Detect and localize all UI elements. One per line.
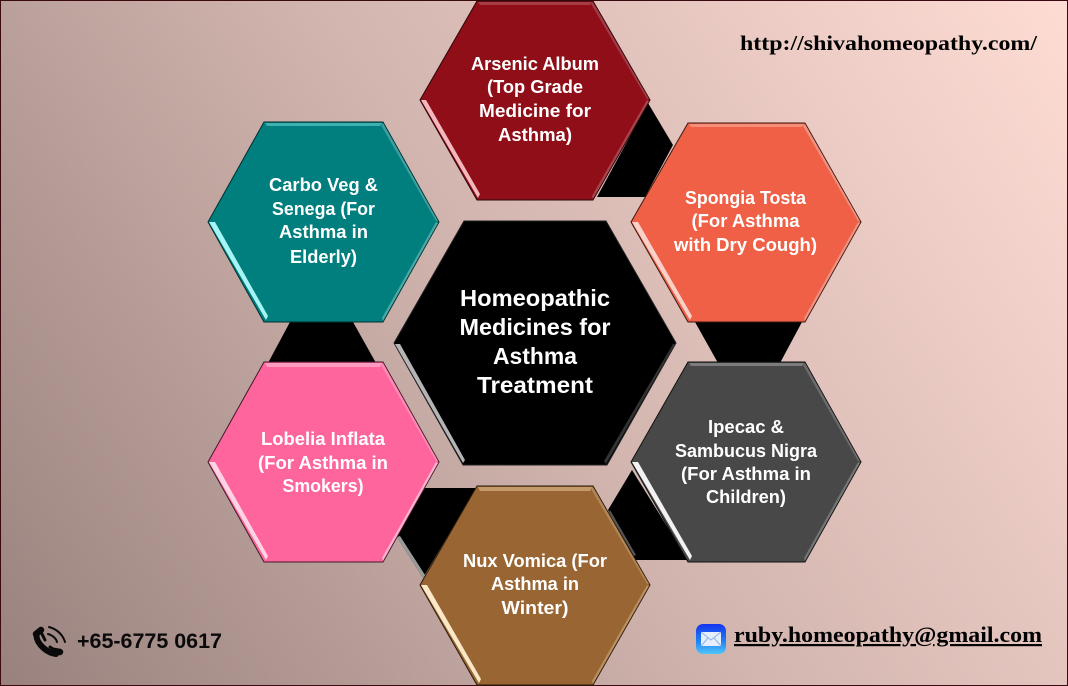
heading: centre title: Medicines for xyxy=(460,314,611,340)
heading: centre title xyxy=(460,285,611,398)
label: Arsenic Album: Asthma) xyxy=(498,125,572,145)
heading: centre title: Homeopathic xyxy=(460,285,610,311)
panel: Carbo Veg and Senega xyxy=(208,122,439,322)
connector: Ipecac to Nux xyxy=(608,470,688,560)
label: Lobelia Inflata: Lobelia Inflata xyxy=(261,429,386,449)
icon: mail xyxy=(696,624,726,654)
panel: Nux Vomica xyxy=(420,486,650,685)
label: Arsenic Album xyxy=(471,54,599,145)
label: Arsenic Album: Arsenic Album xyxy=(471,54,599,74)
label: Lobelia Inflata xyxy=(258,429,388,496)
label: Spongia Tosta: (For Asthma xyxy=(692,211,801,231)
label: Nux Vomica xyxy=(463,551,607,618)
label: Nux Vomica: Winter) xyxy=(502,598,568,618)
label: Spongia Tosta: with Dry Cough) xyxy=(673,235,817,255)
website URL: http://shivahomeopathy.com/ xyxy=(740,31,1038,55)
panel: centre hexagon xyxy=(394,221,676,465)
phone number: +65-6775 0617 xyxy=(77,630,222,653)
label: Carbo Veg and Senega: Elderly) xyxy=(290,247,357,267)
label: Ipecac and Sambucus Nigra: Ipecac & xyxy=(708,417,784,437)
icon: phone xyxy=(36,627,65,654)
label: Nux Vomica: Nux Vomica (For xyxy=(463,551,607,571)
heading: centre title: Asthma xyxy=(493,343,577,369)
heading: centre title: Treatment xyxy=(477,372,593,398)
label: Ipecac and Sambucus Nigra: Sambucus Nigra xyxy=(675,441,818,461)
label: Carbo Veg and Senega: Carbo Veg & xyxy=(269,175,378,195)
label: Lobelia Inflata: Smokers) xyxy=(282,476,364,496)
label: Ipecac and Sambucus Nigra xyxy=(675,417,818,507)
panel: Lobelia Inflata xyxy=(208,362,439,562)
label: Carbo Veg and Senega: Asthma in xyxy=(279,222,368,242)
label: Spongia Tosta xyxy=(673,188,817,255)
panel: Arsenic Album xyxy=(420,1,650,200)
connector: Carbo to Lobelia xyxy=(268,322,376,363)
label: Carbo Veg and Senega xyxy=(269,175,378,267)
panel: Ipecac and Sambucus Nigra xyxy=(631,362,861,562)
panel: Spongia Tosta xyxy=(631,123,861,322)
connector: Lobelia to Nux xyxy=(397,488,476,578)
label: Carbo Veg and Senega: Senega (For xyxy=(272,199,375,219)
label: Ipecac and Sambucus Nigra: Children) xyxy=(706,487,786,507)
label: Arsenic Album: (Top Grade xyxy=(487,77,583,97)
email address: ruby.homeopathy@gmail.com xyxy=(734,622,1042,647)
label: Lobelia Inflata: (For Asthma in xyxy=(258,453,388,473)
connector: Spongia to Ipecac xyxy=(695,322,802,363)
label: Ipecac and Sambucus Nigra: (For Asthma in xyxy=(681,464,811,484)
connector: Arsenic to Spongia xyxy=(597,103,673,197)
label: Nux Vomica: Asthma in xyxy=(491,574,579,594)
label: Arsenic Album: Medicine for xyxy=(479,101,591,121)
label: Spongia Tosta: Spongia Tosta xyxy=(685,188,807,208)
